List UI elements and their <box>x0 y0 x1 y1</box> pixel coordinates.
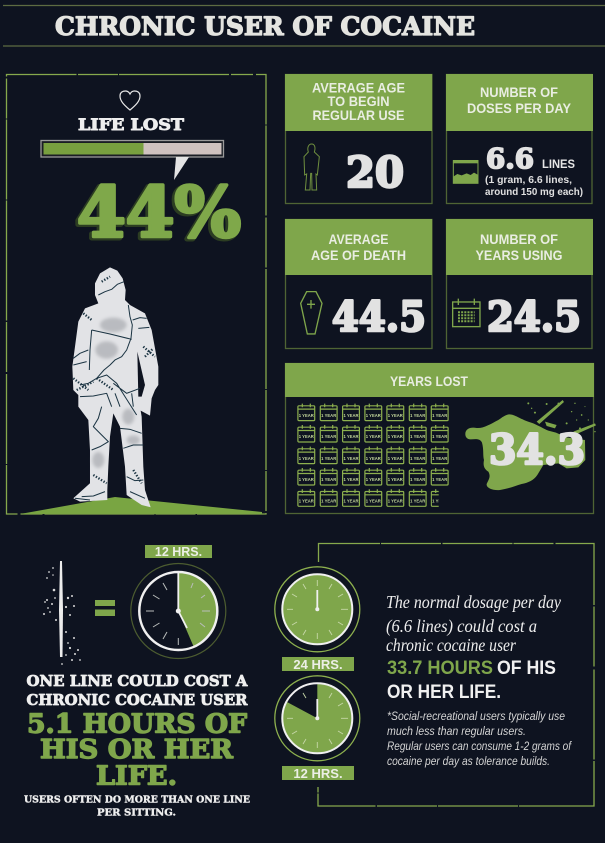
percentage 44%: 44% <box>77 172 241 254</box>
calendar grid: 1 YEAR <box>321 456 336 461</box>
percentage 44%: 44% <box>75 174 239 255</box>
icon: coffin <box>301 292 322 334</box>
calendar grid: 1 YEAR <box>366 498 381 504</box>
calendar grid: 1 YEAR <box>388 434 403 439</box>
clock: 24 hrs <box>275 567 360 652</box>
panel: years using <box>446 219 593 348</box>
panel: doses per day <box>446 74 593 204</box>
header text: AVERAGE <box>328 231 388 247</box>
24 hrs label <box>282 657 354 672</box>
icon: heart <box>120 91 140 110</box>
panel: life lost <box>6 74 266 514</box>
clock: 5.1 hours <box>131 564 226 658</box>
calendar grid: 1 YEAR <box>388 477 403 482</box>
33.7 hours highlight: OR HER LIFE. <box>387 681 501 703</box>
5.1 hours highlight: 5.1 HOURS OF <box>27 710 248 740</box>
calendar grid: 1 YEAR <box>343 477 359 482</box>
33.7 hours highlight: OF HIS <box>497 657 556 679</box>
header <box>285 363 594 397</box>
heading: life lost: LIFE LOST <box>78 115 185 134</box>
calendar grid: 1 YEAR <box>388 413 403 418</box>
panel frame <box>6 74 266 514</box>
header text <box>467 84 572 116</box>
calendar grid: 1 YEAR <box>321 434 336 439</box>
header text: NUMBER OF <box>480 84 558 100</box>
header <box>285 219 432 275</box>
text: one line could cost <box>24 672 250 818</box>
unit lines: LINES <box>542 157 575 171</box>
script lead-in: The normal dosage per day <box>386 592 561 612</box>
dose note: (1 gram, 6.6 lines, <box>485 174 572 186</box>
splat <box>465 400 596 490</box>
24 hrs label: 24 HRS. <box>293 657 343 672</box>
footnote: cocaine per day as tolerance builds. <box>387 754 550 768</box>
script lead-in: (6.6 lines) could cost a <box>386 616 537 637</box>
dose note <box>485 174 583 198</box>
calendar grid: 1 YEAR <box>432 413 447 418</box>
calendar grid: 1 YEAR <box>410 413 425 418</box>
sitting note <box>24 794 250 818</box>
one line statement <box>26 672 248 709</box>
calendar grid: 1 YEAR <box>321 477 336 482</box>
footnote <box>387 709 572 768</box>
33.7 hours highlight <box>387 657 556 703</box>
12 hrs label: 12 HRS. <box>155 545 202 559</box>
value 24.5: 24.5 <box>487 293 581 341</box>
12 hrs label: 12 HRS. <box>293 766 343 781</box>
calendar grid: 1 YEAR <box>299 434 314 439</box>
header <box>446 74 593 131</box>
header <box>285 74 432 131</box>
icon: cocaine line <box>43 561 81 665</box>
one line statement: ONE LINE COULD COST A <box>26 672 248 690</box>
equals sign <box>95 600 115 616</box>
header text: AGE OF DEATH <box>311 247 406 263</box>
calendar grid: 1 YEAR <box>299 477 314 482</box>
calendar grid: 1 YEAR <box>343 498 359 504</box>
one line statement: CHRONIC COCAINE USER <box>26 691 248 709</box>
header text: NUMBER OF <box>480 231 558 247</box>
header <box>446 219 593 275</box>
header text: REGULAR USE <box>312 107 404 123</box>
header text: YEARS LOST <box>390 373 468 389</box>
calendar grid: 1 YEAR <box>410 477 425 482</box>
calendar grid: 1 YEAR <box>366 456 381 461</box>
calendar grid: 1 YEAR <box>366 477 381 482</box>
icon: person <box>304 144 319 190</box>
value 34.3: 34.3 <box>489 426 585 474</box>
calendar grid: 1 YEAR <box>343 413 359 418</box>
calendar grid: 1 YEAR <box>432 456 447 461</box>
calendar grid: 1 YEAR <box>432 477 447 482</box>
header text: TO BEGIN <box>328 93 390 109</box>
title banner <box>3 6 605 46</box>
value 44.5: 44.5 <box>332 293 426 341</box>
5.1 hours highlight: LIFE. <box>96 762 177 792</box>
calendar grid: 1 YEAR <box>299 413 314 418</box>
pointer <box>174 157 189 180</box>
value 20: 20 <box>346 148 404 197</box>
panel: age of death <box>285 219 432 348</box>
header text <box>311 231 406 263</box>
calendar grid: 1 YEAR <box>366 434 381 439</box>
calendar grid: 1 YEAR <box>321 498 336 504</box>
footnote: much less than regular users. <box>387 724 526 738</box>
ground <box>20 497 262 514</box>
sitting note: USERS OFTEN DO MORE THAN ONE LINE <box>24 794 250 806</box>
header text: DOSES PER DAY <box>467 100 572 116</box>
header text: AVERAGE AGE <box>312 80 405 96</box>
calendar grid: 1 YEAR <box>410 434 425 439</box>
header text <box>312 80 405 123</box>
calendar grid: 1 YEAR <box>321 413 336 418</box>
panel frame: dosage <box>318 544 594 806</box>
header text <box>476 231 563 263</box>
script lead-in <box>386 592 561 655</box>
sitting note: PER SITTING. <box>97 808 176 818</box>
calendar grid: 1 YEAR <box>410 498 425 504</box>
calendar grid: 1 YEAR <box>388 498 403 504</box>
calendar grid: 1 YEAR <box>388 456 403 461</box>
script lead-in: chronic cocaine user <box>386 635 517 655</box>
5.1 hours highlight <box>27 710 248 792</box>
12 hrs label <box>282 766 354 781</box>
calendar grid: 1 YEAR <box>432 434 447 439</box>
dose note: around 150 mg each) <box>485 186 583 198</box>
calendar grid: 1 YEAR <box>299 498 314 504</box>
calendar grid: 1 YEAR <box>410 456 425 461</box>
header text: YEARS USING <box>476 247 563 263</box>
33.7 hours highlight: 33.7 HOURS <box>387 657 493 679</box>
icon: lines pile <box>453 160 478 183</box>
icon: calendar <box>453 299 480 327</box>
clock: 12 hrs <box>275 676 360 761</box>
footnote: Regular users can consume 1-2 grams of <box>387 739 572 753</box>
calendar grid <box>298 404 448 506</box>
5.1 hours highlight: HIS OR HER <box>40 735 233 765</box>
calendar grid: 1 YEAR <box>299 456 314 461</box>
calendar grid: 1 YEAR <box>432 498 447 504</box>
panel: age to begin <box>285 74 432 204</box>
title banner: CHRONIC USER OF COCAINE <box>55 12 475 41</box>
calendar grid: 1 YEAR <box>343 456 359 461</box>
footnote: *Social-recreational users typically use <box>387 709 565 723</box>
value 6.6: 6.6 <box>486 144 534 175</box>
calendar grid: 1 YEAR <box>343 434 359 439</box>
panel: years lost <box>285 363 596 514</box>
text: dosage statement <box>386 592 572 768</box>
calendar grid: 1 YEAR <box>366 413 381 418</box>
progress bar <box>41 140 224 157</box>
cracked figure <box>72 267 158 507</box>
